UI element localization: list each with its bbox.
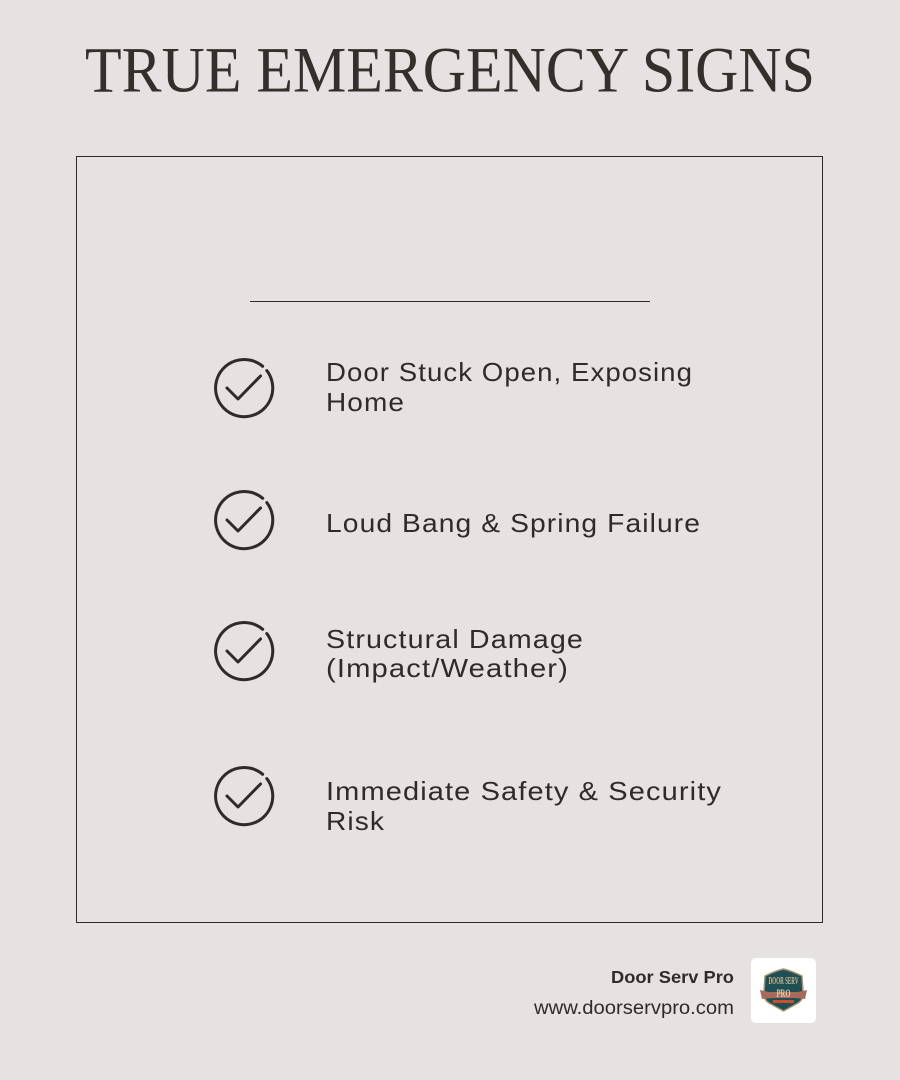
- text: (Impact/Weather): [326, 653, 569, 683]
- footer: website: www.doorservpro.com: [533, 997, 734, 1019]
- title: TRUE EMERGENCY SIGNS: [85, 34, 815, 106]
- text: Door Stuck Open, Exposing: [326, 357, 693, 387]
- icon: check circle: [216, 491, 273, 549]
- icon: check circle: [216, 622, 273, 680]
- sign 3: structural damage: [216, 622, 584, 683]
- logo: Door Serv Pro badge: [751, 958, 816, 1023]
- logo: Door Serv Pro badge: DOOR SERV: [768, 976, 799, 987]
- sign 2: loud bang: [216, 491, 701, 549]
- text: Risk: [326, 806, 385, 836]
- icon: check circle: [216, 359, 273, 417]
- text: Immediate Safety & Security: [326, 776, 722, 806]
- text: Loud Bang & Spring Failure: [326, 508, 701, 538]
- icon: check circle: [216, 767, 273, 825]
- sign 4: safety risk: [216, 767, 722, 836]
- logo: Door Serv Pro badge: PRO: [776, 986, 790, 1000]
- panel: emergency signs: [76, 156, 822, 922]
- text: Home: [326, 387, 405, 417]
- footer: brand name: Door Serv Pro: [611, 967, 734, 987]
- text: Structural Damage: [326, 624, 584, 654]
- sign 1: door stuck open: [216, 357, 693, 417]
